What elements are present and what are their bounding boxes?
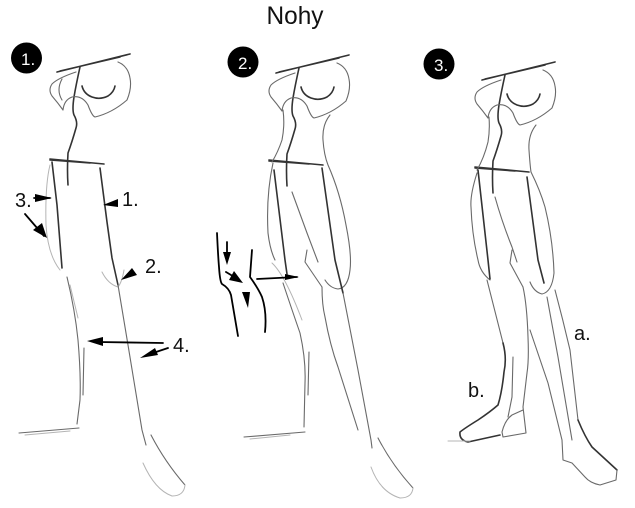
badge 2: 2. [238, 54, 252, 73]
labels a and b [468, 323, 591, 402]
inset knee diagram [217, 233, 299, 336]
figure 1: leg construction [11, 42, 190, 496]
badge 1: 1. [21, 50, 35, 69]
figure 3 head [475, 62, 556, 193]
figure 3 left leg and foot [448, 280, 528, 442]
figure 3: finished legs [424, 48, 617, 485]
labels and arrows for figure 1 [15, 189, 190, 358]
figure 2 lower legs and feet [244, 263, 413, 498]
labels a and b: a. [574, 323, 591, 345]
badge 2 [228, 46, 258, 78]
figure 3 right leg and foot [530, 290, 617, 485]
labels and arrows for figure 1: 4. [173, 335, 190, 357]
figure 2 head [269, 55, 350, 186]
badge 3 [424, 48, 454, 80]
labels and arrows for figure 1: 3. [15, 190, 32, 212]
figure 1 torso and head [50, 54, 131, 185]
labels a and b: b. [468, 380, 485, 402]
labels and arrows for figure 1: 1. [122, 189, 139, 211]
title: Nohy [266, 2, 324, 30]
figure 1 lower leg and foot [19, 277, 185, 496]
figure 2: leg outline [217, 46, 413, 498]
badge 1 [11, 42, 42, 74]
figure 3 torso and thighs [471, 117, 554, 294]
badge 3: 3. [434, 56, 448, 75]
figure 1 thigh lines [46, 162, 124, 287]
labels and arrows for figure 1: 2. [145, 256, 162, 278]
figure 2 torso and thighs [268, 110, 350, 293]
